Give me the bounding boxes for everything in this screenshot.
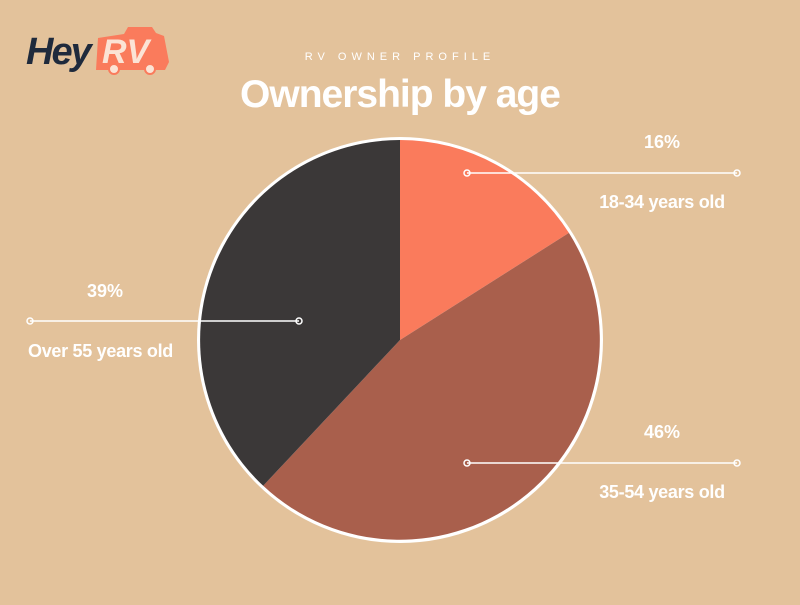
label: 16%: 16% — [644, 132, 680, 152]
slice: 35-54 — [263, 233, 600, 540]
icon: rv van — [96, 27, 169, 74]
logo: Hey — [26, 31, 94, 73]
label: 18-34: 18-34 years old — [599, 192, 725, 212]
slice: 18-34 — [400, 140, 569, 340]
label: 39%: 39% — [87, 281, 123, 301]
label: 46%: 46% — [644, 422, 680, 442]
label: over 55: Over 55 years old — [28, 341, 173, 361]
logo: RV — [102, 33, 153, 71]
logo — [26, 27, 169, 75]
label: 35-54: 35-54 years old — [599, 482, 725, 502]
slice: over 55 — [200, 140, 400, 486]
leader lines — [27, 170, 740, 466]
title: Ownership by age — [240, 73, 560, 116]
subtitle: RV OWNER PROFILE — [305, 51, 495, 63]
